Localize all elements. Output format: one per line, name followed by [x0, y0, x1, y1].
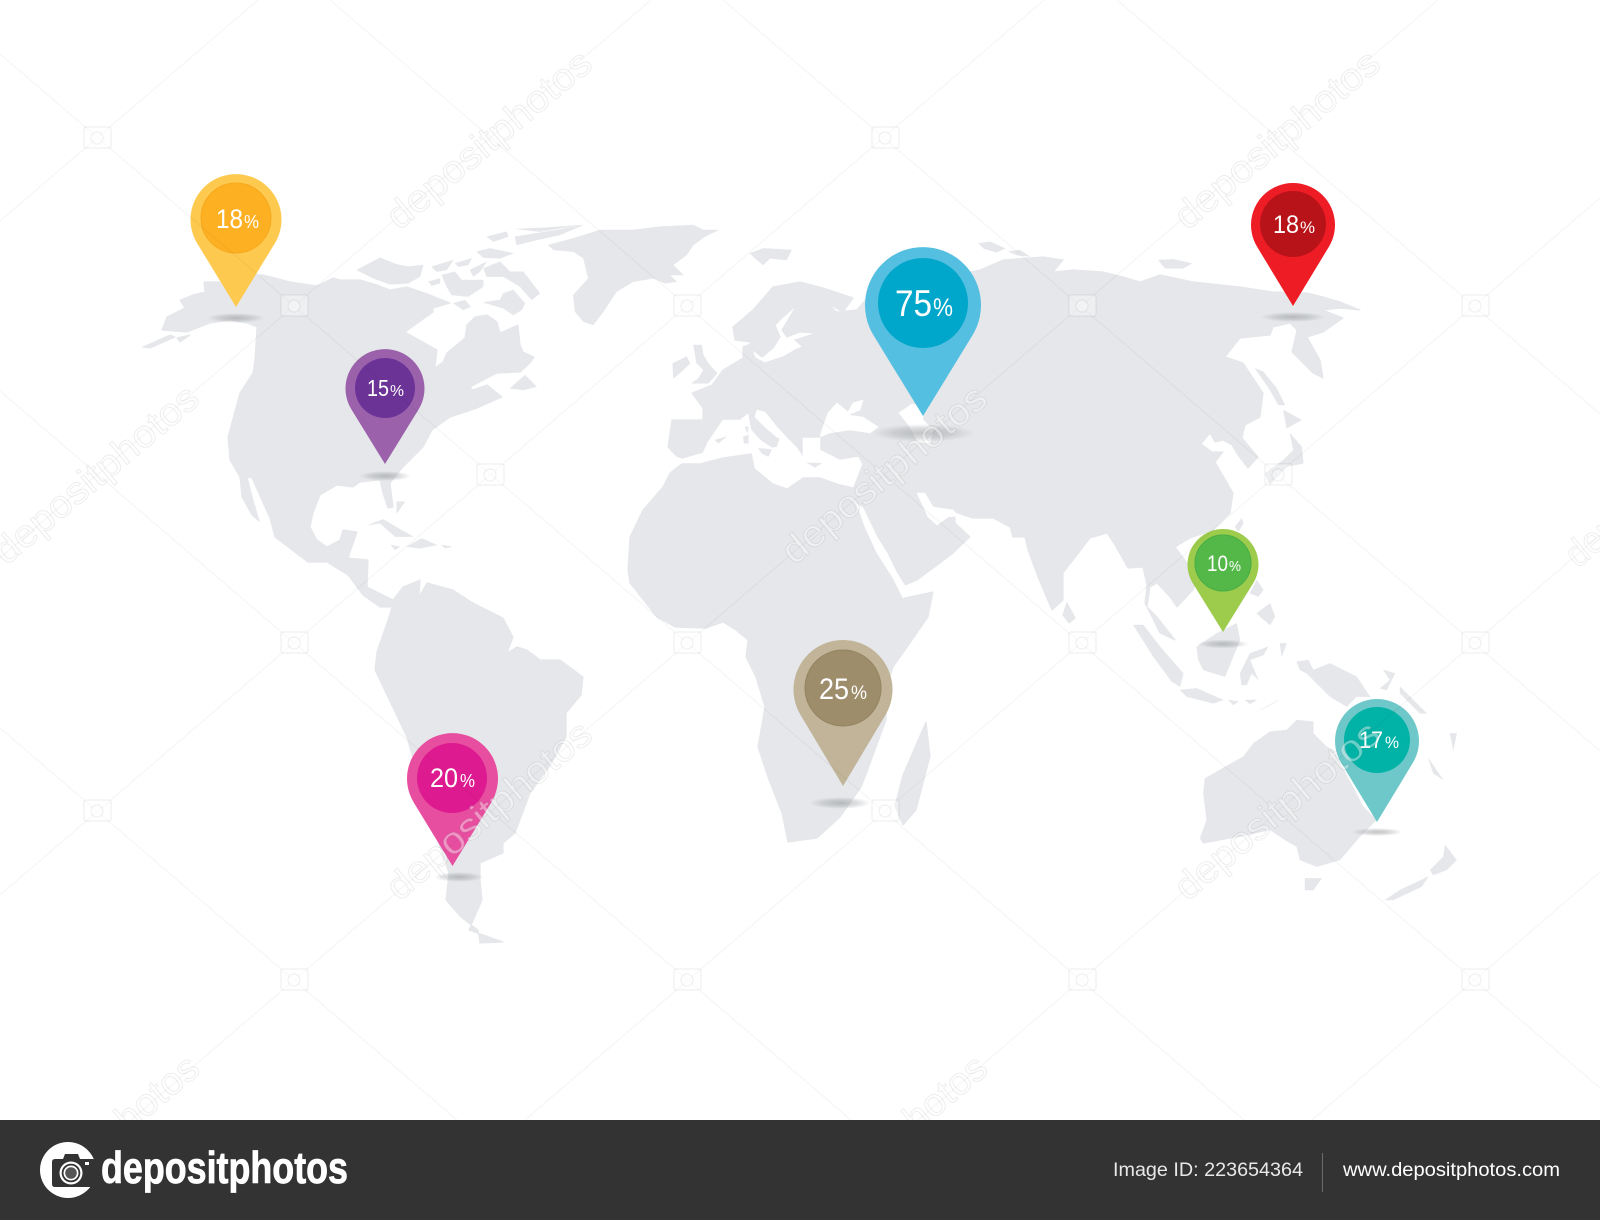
- pin: purple 15%: %: [390, 383, 404, 400]
- watermark: depositphotos text: depositphotos: [378, 713, 600, 909]
- Black Sea: [820, 400, 878, 437]
- pin: yellow 18%: 18: [216, 204, 243, 234]
- watermark: depositphotos text: depositphotos: [1166, 42, 1388, 238]
- pin: tan 25%: %: [851, 683, 867, 704]
- pin: pink 20%: [407, 733, 498, 866]
- watermark: depositphotos text: depositphotos: [773, 377, 995, 573]
- pin: green 10%: [1188, 529, 1258, 632]
- watermark: depositphotos text: depositphotos: [378, 42, 600, 238]
- pin: yellow 18%: %: [244, 212, 259, 232]
- pin: green 10%: 10: [1207, 551, 1228, 576]
- islands: Southeast Asia and Oceania: [1133, 580, 1457, 900]
- island: Sri Lanka: [1063, 603, 1075, 623]
- islands: Arctic Russia: [978, 242, 1192, 268]
- pin: red 18%: %: [1300, 218, 1315, 237]
- pin: tan 25%: 25: [819, 673, 849, 706]
- islands: East Asia: [1235, 368, 1303, 532]
- pin: blue 75%: 75: [895, 283, 932, 324]
- inland seas: [664, 400, 958, 598]
- pin: teal 17%: %: [1385, 733, 1399, 752]
- pin: red 18%: [1251, 183, 1335, 306]
- website url: www.depositphotos.com: [1342, 1159, 1560, 1181]
- pin: purple 15%: [346, 349, 424, 464]
- pin shadows: [207, 312, 1403, 882]
- landmass: Eurasia and Africa: [628, 257, 1360, 842]
- watermark: depositphotos text: photos: [878, 1047, 996, 1155]
- pin: yellow 18%: [191, 174, 282, 307]
- islands: Europe: [673, 248, 822, 467]
- Mediterranean Sea: [664, 414, 862, 488]
- icon: camera logo: [40, 1142, 96, 1198]
- pin: teal 17%: [1335, 699, 1419, 822]
- islands: Caribbean: [368, 502, 452, 550]
- watermark: camera marks: [84, 127, 1489, 990]
- watermark: depositphotos text: depositphotos: [1166, 713, 1388, 909]
- landmass: the Americas: [162, 275, 583, 943]
- Adriatic Sea: [755, 410, 787, 438]
- islands: Aleutians: [143, 335, 190, 348]
- pin: red 18%: 18: [1273, 211, 1299, 239]
- islands: Arctic Canada and Greenland: [357, 225, 718, 390]
- island: Madagascar: [895, 722, 930, 825]
- pin: green 10%: %: [1229, 558, 1241, 575]
- logo wordmark: depositphotos: [101, 1144, 348, 1193]
- footer banner: [0, 1120, 1600, 1220]
- pin: pink 20%: %: [460, 771, 475, 791]
- Red Sea: [857, 504, 933, 598]
- pin: blue 75%: [865, 247, 981, 416]
- Caspian Sea: [899, 404, 933, 443]
- pin: teal 17%: 17: [1359, 727, 1383, 754]
- pin: tan 25%: [794, 640, 893, 786]
- pin: blue 75%: %: [933, 294, 953, 322]
- watermark: depositphotos text: photos: [90, 1047, 208, 1155]
- pin: pink 20%: 20: [430, 763, 458, 793]
- world map: [143, 225, 1457, 943]
- pin: purple 15%: 15: [367, 375, 389, 401]
- Persian Gulf: [917, 493, 958, 525]
- image id: Image ID: 223654364: [1113, 1159, 1303, 1181]
